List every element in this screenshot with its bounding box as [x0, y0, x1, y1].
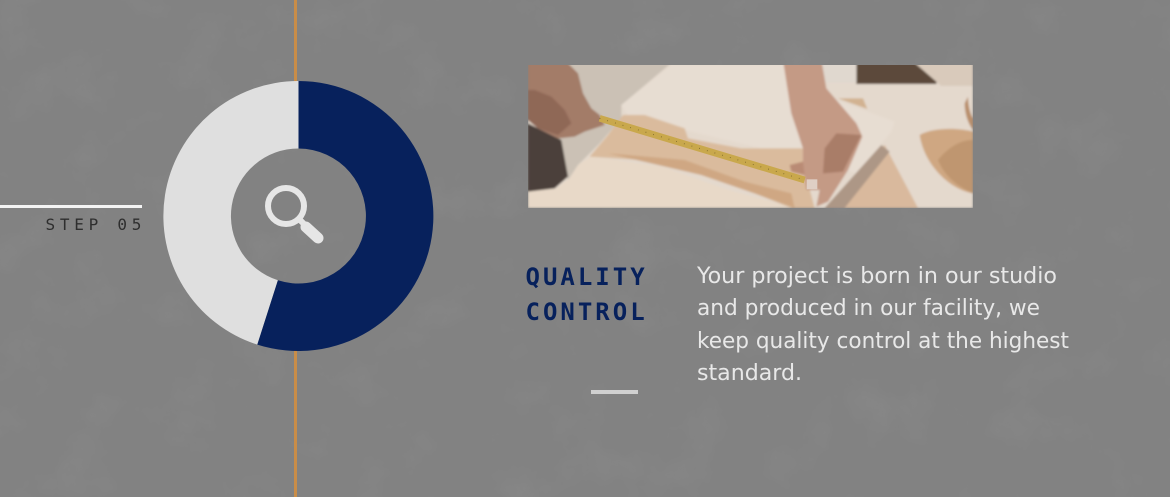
- orange vertical line: [294, 0, 297, 497]
- step rule: [0, 205, 142, 208]
- photo: hands measuring wood with tape: [528, 60, 973, 208]
- body text: standard.: [697, 360, 802, 386]
- icon: magnifying glass: [268, 188, 318, 238]
- short accent rule: [591, 390, 638, 394]
- heading: CONTROL: [526, 298, 648, 326]
- body text: Your project is born in our studio: [696, 263, 1057, 289]
- donut chart: [163, 81, 433, 351]
- body text: keep quality control at the highest: [697, 328, 1069, 354]
- body text: and produced in our facility, we: [697, 295, 1040, 321]
- heading: QUALITY: [526, 263, 648, 291]
- step label: STEP 05: [46, 215, 146, 234]
